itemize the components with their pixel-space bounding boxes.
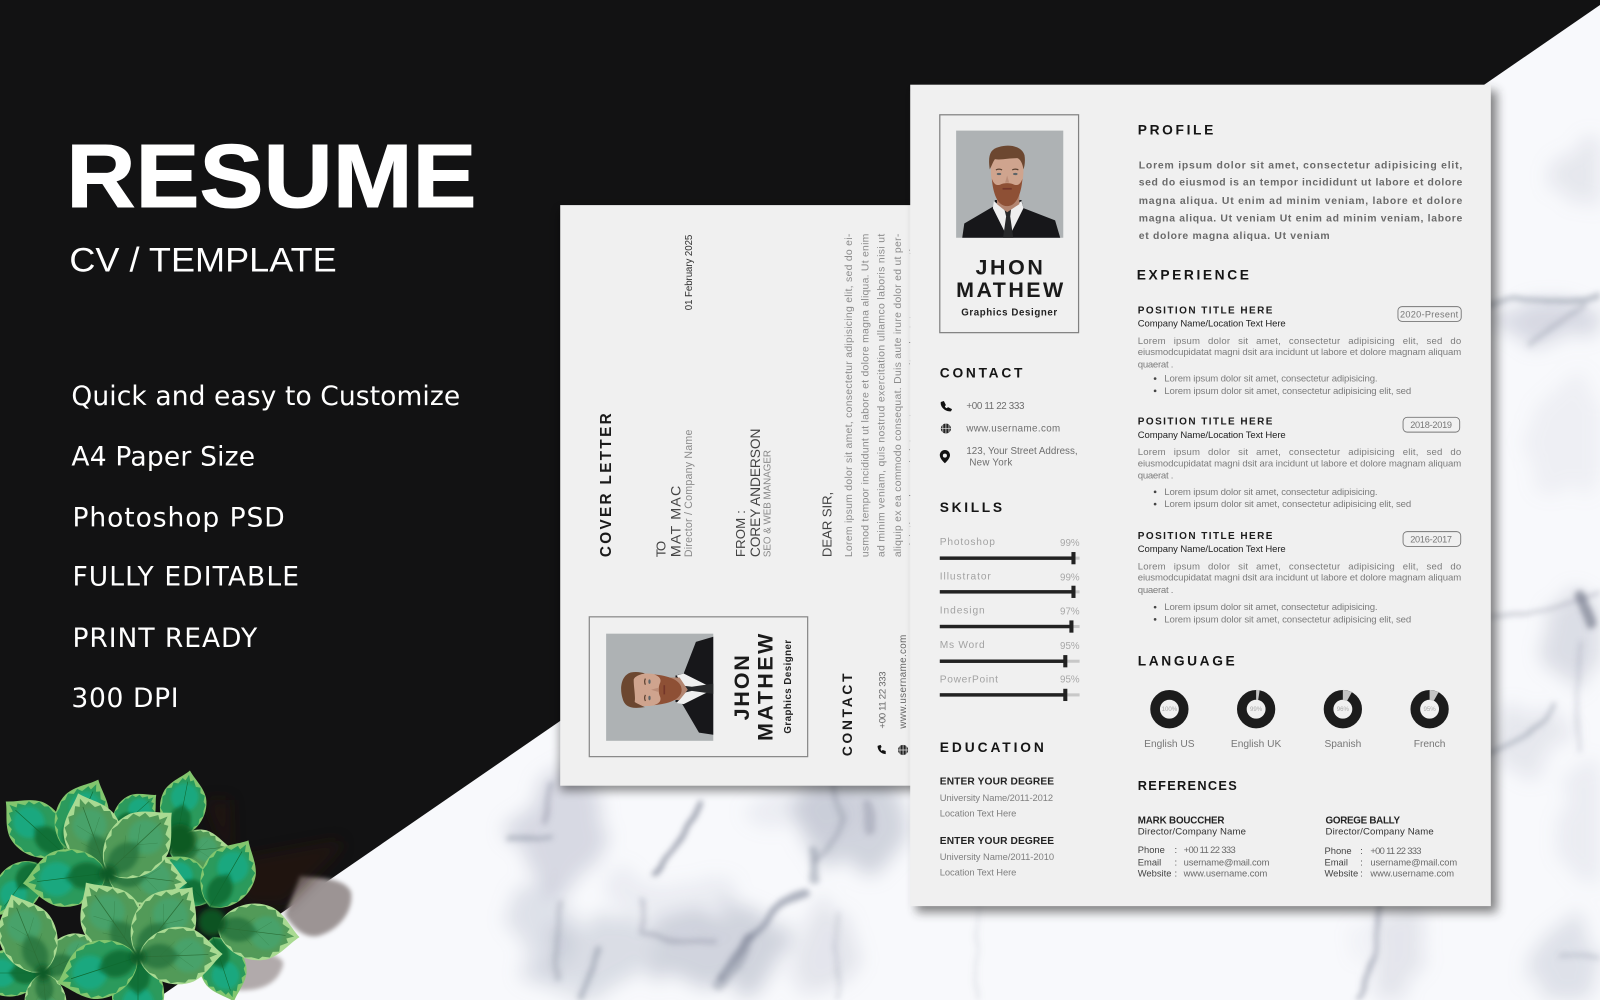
letter body: Lorem ipsum dolor sit amet, consectetur adipisicing elit, sed do ei- [844, 234, 855, 557]
reference 1: Email [1138, 857, 1161, 867]
job entry 3: eiusmodcupidatat magni dsit ara incidunt ut labore et dolore magnam aliquam [1138, 573, 1461, 584]
letter body: aliquip ex ea commodo consequat. Duis aute irure dolor ed ut per- [893, 234, 904, 557]
skill bar: Indesign: Indesign [940, 605, 985, 616]
reference 1: : [1174, 845, 1177, 855]
job entry 1: quaerat . [1138, 359, 1173, 370]
education section: University Name/2011-2010 [940, 852, 1054, 862]
skill bar: Ms Word: 95% [1060, 641, 1080, 652]
donut: French: 95% [1423, 706, 1436, 713]
profile section: magna aliqua. Ut veniam Ut enim ad minim veniam, labore [1139, 213, 1462, 224]
letter body [844, 234, 919, 557]
job entry 3: Lorem ipsum dolor sit amet, consectetur adipisicing. [1164, 602, 1378, 613]
icon: location pin [940, 450, 950, 463]
job entry 2: POSITION TITLE HERE [1138, 416, 1273, 427]
donut: French [1414, 690, 1445, 750]
skill bar: Indesign [940, 605, 1080, 633]
title: RESUME [66, 127, 477, 227]
panel: cover letter page [560, 205, 928, 791]
name rotated: JHON [730, 655, 754, 720]
reference 2: : [1360, 846, 1363, 856]
soft cloud patches [515, 135, 1600, 1000]
education section: ENTER YOUR DEGREE [940, 836, 1054, 847]
plant cast shadow [205, 800, 351, 990]
education section: ENTER YOUR DEGREE [940, 777, 1054, 788]
skill bar: Photoshop: 99% [1060, 538, 1080, 549]
contact rotated: www.username.com [898, 635, 909, 730]
skill bar: Illustrator [940, 572, 1080, 598]
reference 2: Website [1324, 869, 1358, 879]
education section: University Name/2011-2012 [940, 793, 1053, 803]
feature list [71, 381, 460, 714]
contact section [940, 366, 1078, 468]
reference 2 [1324, 815, 1457, 879]
photo rotated [606, 634, 713, 741]
skill bar: PowerPoint: PowerPoint [940, 675, 998, 686]
reference 1: www.username.com [1183, 869, 1268, 879]
skill bar: Indesign: 97% [1060, 606, 1080, 617]
addressee: TO [653, 541, 668, 557]
date: 01 February 2025 [684, 235, 695, 310]
feature list: Quick and easy to Customize [71, 381, 460, 412]
skill bar: Illustrator: Illustrator [940, 572, 991, 583]
reference 2: www.username.com [1369, 869, 1454, 879]
job entry 3: Company Name/Location Text Here [1138, 544, 1286, 555]
contact section: CONTACT [940, 366, 1023, 381]
salutation: DEAR SIR, [820, 492, 835, 557]
experience section: EXPERIENCE [1137, 268, 1249, 283]
icon: globe [941, 423, 951, 434]
job entry 1 [1138, 305, 1461, 397]
ID card [940, 115, 1079, 333]
education section [940, 740, 1054, 878]
reference 1: MARK BOUCCHER [1138, 815, 1224, 826]
job entry 2: 2018-2019 [1410, 420, 1452, 430]
contact section: 123, Your Street Address, [966, 446, 1078, 457]
contact rotated: +00 11 22 333 [878, 671, 889, 729]
addressee: Director / Company Name [683, 429, 695, 557]
sender: COREY ANDERSON [748, 429, 763, 557]
skill bar: PowerPoint [940, 675, 1080, 701]
job entry 3: Lorem ipsum dolor sit amet, consectetur adipisicing elit, sed do [1138, 561, 1461, 572]
plant [0, 766, 303, 1000]
job entry 2: Lorem ipsum dolor sit amet, consectetur adipisicing elit, sed do [1138, 447, 1461, 458]
job entry 1: eiusmodcupidatat magni dsit ara incidunt ut labore et dolore magnam aliquam [1138, 347, 1461, 358]
skill bar: Illustrator: 99% [1060, 573, 1080, 584]
contact section: www.username.com [965, 424, 1060, 435]
donut: Spanish: Spanish [1324, 739, 1361, 750]
cover letter heading: COVER LETTER [598, 413, 615, 557]
skill bar: Ms Word [940, 640, 1080, 667]
donut: French: French [1414, 739, 1445, 750]
contact rotated [840, 635, 909, 756]
skill bar: Photoshop [940, 537, 1080, 564]
job entry 3: POSITION TITLE HERE [1138, 531, 1273, 542]
contact section: New York [969, 457, 1012, 468]
job entry 1: POSITION TITLE HERE [1138, 305, 1273, 316]
job entry 3: 2016-2017 [1410, 534, 1452, 544]
addressee [653, 429, 695, 557]
profile section: Lorem ipsum dolor sit amet, consectetur adipisicing elit, [1139, 160, 1462, 171]
job entry 3: Lorem ipsum dolor sit amet, consectetur adipisicing elit, sed [1164, 614, 1411, 625]
profile section: sed do eiusmod is an tempor incididunt ut labore et dolore [1139, 178, 1462, 189]
job entry 2: eiusmodcupidatat magni dsit ara incidunt ut labore et dolore magnam aliquam [1138, 458, 1461, 469]
references section: REFERENCES [1138, 778, 1237, 793]
addressee: MAT MAC [669, 486, 685, 557]
reference 1: Director/Company Name [1138, 827, 1246, 838]
reference 1: Website [1138, 869, 1171, 879]
donut: English US: 100% [1162, 706, 1178, 713]
ID card rotated: MATHEW [753, 633, 777, 741]
letter body: usmod tempor incididunt ut labore et dolore magna aliqua. Ut enim [860, 234, 871, 557]
feature list: PRINT READY [72, 623, 258, 654]
reference 1: username@mail.com [1184, 857, 1270, 867]
job entry 2: Lorem ipsum dolor sit amet, consectetur adipisicing. [1164, 487, 1378, 498]
contact section: +00 11 22 333 [966, 401, 1025, 412]
feature list: 300 DPI [71, 683, 179, 714]
feature list: Photoshop PSD [72, 503, 285, 534]
donut: Spanish [1324, 690, 1361, 750]
ID card rotated: Graphics Designer [783, 640, 794, 734]
experience section [1137, 268, 1461, 625]
reference 2: +00 11 22 333 [1370, 846, 1421, 856]
reference 2: : [1360, 857, 1363, 867]
references section [1138, 778, 1457, 879]
sender [733, 429, 773, 557]
donut: English UK: English UK [1231, 739, 1282, 750]
language section [1138, 653, 1445, 750]
skill bar: Photoshop: Photoshop [940, 537, 995, 548]
reference 1: +00 11 22 333 [1184, 845, 1236, 855]
job entry 1: Lorem ipsum dolor sit amet, consectetur adipisicing elit, sed do [1138, 336, 1461, 347]
donut: English US: English US [1144, 739, 1195, 750]
skills section: SKILLS [940, 500, 1002, 515]
reference 2: Phone [1324, 846, 1352, 856]
reference 1: Phone [1138, 845, 1165, 855]
reference 1: : [1174, 869, 1177, 879]
subtitle: CV / TEMPLATE [69, 241, 337, 279]
job entry 3 [1138, 531, 1461, 625]
skill bar: Ms Word: Ms Word [940, 640, 985, 651]
skill bar: PowerPoint: 95% [1060, 675, 1080, 686]
reference 1: : [1174, 857, 1177, 867]
donut: English UK: 99% [1250, 706, 1263, 713]
job entry 1: Lorem ipsum dolor sit amet, consectetur adipisicing elit, sed [1164, 386, 1411, 397]
reference 2: Director/Company Name [1326, 827, 1434, 838]
sender: FROM : [733, 510, 748, 557]
icon: phone [941, 401, 952, 411]
job title: Graphics Designer [961, 307, 1057, 318]
ID card rotated [589, 617, 808, 757]
education section: Location Text Here [940, 868, 1016, 878]
letter body: spiciatis unde omnis iste natus error sit voluptatem accusantium [908, 234, 919, 557]
ID card: MATHEW [956, 278, 1064, 302]
job entry 2 [1138, 416, 1461, 510]
sender: SEO & WEB MANAGER [762, 450, 773, 557]
donut: English UK [1231, 690, 1282, 750]
reference 2: : [1360, 869, 1363, 879]
donut: English US [1144, 695, 1195, 750]
job entry 2: Company Name/Location Text Here [1138, 430, 1286, 441]
job entry 1: Lorem ipsum dolor sit amet, consectetur adipisicing. [1164, 374, 1378, 385]
feature list: A4 Paper Size [71, 441, 255, 472]
contact rotated: CONTACT [840, 673, 855, 756]
skills section [940, 500, 1080, 701]
reference 2: GOREGE BALLY [1326, 815, 1400, 826]
photo [956, 131, 1063, 238]
job entry 3: quaerat . [1138, 585, 1173, 596]
job entry 1: 2020-Present [1400, 309, 1459, 319]
profile section: magna aliqua. Ut enim ad minim veniam, labore et dolore [1139, 196, 1462, 207]
profile section: et dolore magna aliqua. Ut veniam [1139, 231, 1330, 242]
donut: Spanish: 96% [1337, 706, 1350, 713]
name: JHON [976, 255, 1043, 279]
reference 2: username@mail.com [1370, 857, 1457, 867]
education section: Location Text Here [940, 808, 1016, 818]
letter body: ad minim veniam, quis nostrud exercitation ullamco laboris nisi ut [877, 234, 888, 557]
job entry 2: quaerat . [1138, 471, 1173, 482]
reference 1 [1138, 815, 1270, 879]
education section: EDUCATION [940, 740, 1044, 755]
panel: resume page [910, 85, 1497, 912]
job entry 1: Company Name/Location Text Here [1138, 319, 1286, 330]
job entry 2: Lorem ipsum dolor sit amet, consectetur adipisicing elit, sed [1164, 499, 1411, 510]
language section: LANGUAGE [1138, 653, 1235, 668]
profile section: PROFILE [1138, 123, 1213, 138]
profile section [1138, 123, 1462, 242]
reference 2: Email [1324, 857, 1348, 867]
feature list: FULLY EDITABLE [72, 562, 299, 593]
